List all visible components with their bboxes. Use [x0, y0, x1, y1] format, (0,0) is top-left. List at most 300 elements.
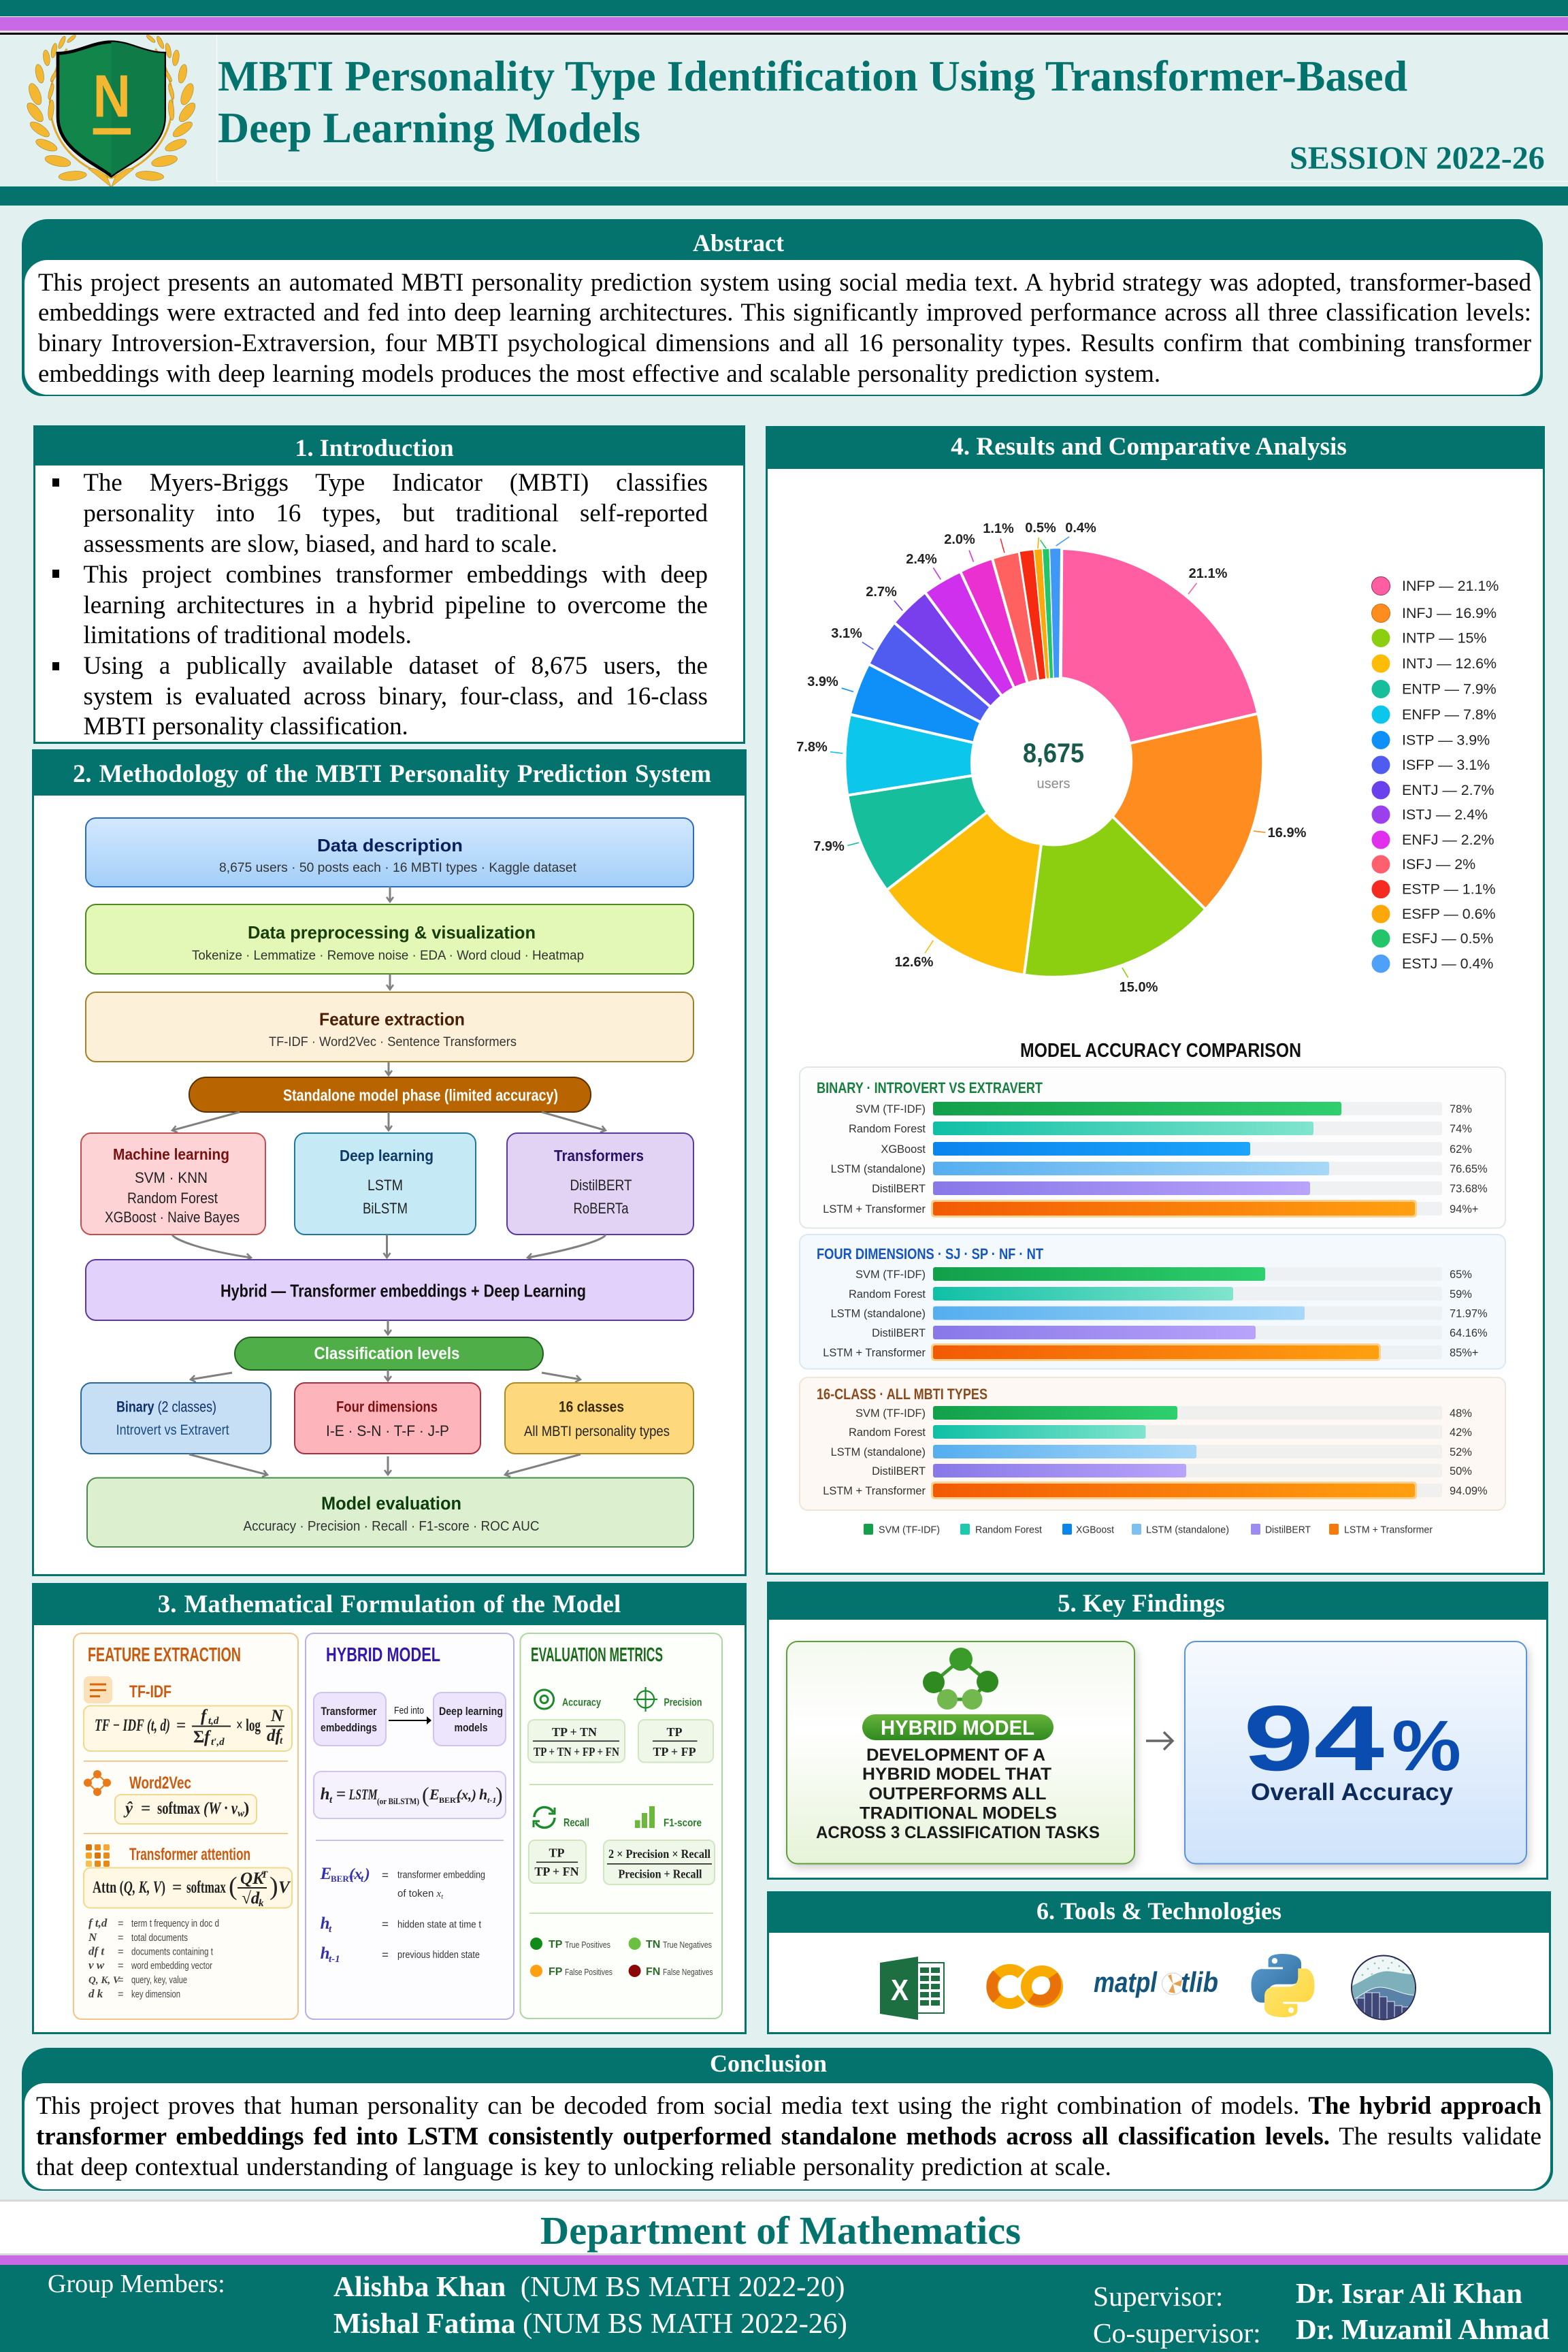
box: model evaluation: Accuracy · Precision · Recall · F1-score · ROC AUC: [244, 1519, 539, 1534]
conclusion text: that deep contextual understanding of language is key to unlocking reliable personality prediction at scale.: [36, 2153, 1111, 2180]
card: feature extraction: FEATURE EXTRACTION: [88, 1644, 241, 1666]
card: hybrid model: Fed into: [394, 1705, 424, 1716]
session label: SESSION 2022-26: [1290, 140, 1545, 176]
bar group: sixteen class: DistilBERT: [872, 1465, 926, 1477]
box: four dimensions: I-E · S-N · T-F · J-P: [326, 1422, 449, 1439]
heading: mathematical formulation: 3. Mathematical Formulation of the Model: [158, 1590, 621, 1618]
icon: university crest logo: [27, 35, 195, 186]
formula: word2vec: w: [238, 1808, 245, 1819]
formula: lstm: t-1: [487, 1795, 496, 1805]
formula: lstm: BERT: [439, 1795, 461, 1805]
top banner: teal and purple stripes: [0, 0, 1568, 35]
symbol legend: total documents: [131, 1933, 188, 1944]
formula: tf-idf: Σ: [193, 1728, 204, 1746]
icon: seaborn: [1351, 1956, 1417, 2025]
formula: accuracy: TP + TN: [552, 1725, 597, 1739]
bar group: binary: 94%+: [1450, 1203, 1478, 1215]
bar group: four dimensions: 85%+: [1450, 1347, 1478, 1359]
box: transformer embeddings: Transformer: [321, 1705, 377, 1718]
card: feature extraction: [74, 1633, 298, 2019]
pill: classification levels: Classification levels: [314, 1344, 460, 1363]
icon: word2vec network: [84, 1770, 111, 1796]
formula: tf-idf: t′,d: [211, 1737, 225, 1748]
heading: introduction: 1. Introduction: [295, 434, 454, 461]
box: feature extraction: TF-IDF · Word2Vec · Sentence Transformers: [269, 1035, 517, 1049]
donut centre total: 8,675: [1023, 738, 1084, 768]
pill: classification levels: [235, 1337, 543, 1370]
card: evaluation metrics: Precision: [664, 1697, 702, 1708]
formula: tf-idf: [84, 1705, 292, 1751]
group members label: Group Members:: [48, 2270, 225, 2298]
formula: lstm: (x,): [457, 1786, 476, 1803]
box: machine learning: Random Forest: [127, 1190, 218, 1207]
bar group: binary: SVM (TF-IDF): [855, 1103, 926, 1115]
formula: word2vec: [115, 1795, 257, 1824]
member names: Mishal Fatima (NUM BS MATH 2022-26): [333, 2308, 847, 2340]
slice percentage labels: 2.0%: [944, 532, 975, 547]
formula: lstm: (or BiLSTM): [377, 1796, 419, 1806]
formula: recall: [529, 1840, 586, 1883]
box: machine learning: Machine learning: [113, 1145, 229, 1163]
pie legend: INFJ — 16.9%: [1402, 605, 1497, 621]
icon: precision crosshair: [634, 1687, 657, 1712]
bar group: binary: 74%: [1450, 1123, 1472, 1135]
pie legend: ESFP — 0.6%: [1402, 906, 1496, 922]
icon: accuracy target: [535, 1690, 554, 1709]
supervisors: Dr. Israr Ali Khan: [1296, 2278, 1522, 2310]
bar chart legend: SVM (TF-IDF): [879, 1524, 940, 1535]
arrows to classification levels: [191, 1370, 581, 1381]
title: MBTI Personality Type Identification Using Transformer-Based: [218, 52, 1407, 100]
symbol legend: v w: [88, 1959, 105, 1972]
formula: attention: QK: [240, 1869, 265, 1888]
formula: lstm: =: [336, 1785, 346, 1803]
card: hybrid model: HYBRID MODEL: [326, 1644, 440, 1666]
formula: lstm: (: [422, 1782, 429, 1807]
introduction bullet text: [35, 466, 743, 742]
box: transformers: Transformers: [554, 1147, 644, 1164]
formula: tf-idf: N: [270, 1707, 284, 1725]
bar group: four dimensions: 59%: [1450, 1288, 1472, 1301]
symbol legend: =: [118, 1918, 124, 1929]
donut chart: MBTI distribution: [796, 521, 1307, 995]
card: hybrid model: [306, 1633, 514, 2019]
arrow: finding to accuracy: [1146, 1732, 1173, 1750]
icon: attention grid: [86, 1844, 110, 1867]
bar chart legend: Random Forest: [975, 1524, 1043, 1535]
hybrid symbol definitions: [320, 1865, 485, 1965]
bar group: sixteen class: SVM (TF-IDF): [855, 1407, 926, 1420]
confusion matrix legend: True Positives: [565, 1940, 610, 1950]
bar group: sixteen class: 52%: [1450, 1446, 1472, 1458]
panel: conclusion: [22, 2048, 1553, 2191]
slice percentage labels: 0.4%: [1065, 521, 1096, 536]
bar group: binary: 62%: [1450, 1143, 1472, 1156]
card: hybrid model finding: [787, 1642, 1134, 1863]
badge: hybrid model: HYBRID MODEL: [881, 1716, 1034, 1740]
formula: word2vec: ŷ: [123, 1799, 133, 1818]
panel: 6. Tools & Technologies: [767, 1891, 1551, 2034]
formula: tf-idf: =: [176, 1716, 186, 1735]
formula: lstm: [314, 1771, 506, 1818]
pie legend: ESTP — 1.1%: [1402, 881, 1496, 898]
pie legend: INTJ — 12.6%: [1402, 655, 1497, 672]
formula: accuracy: TP + TN + FP + FN: [534, 1745, 619, 1759]
arrows to model families: [172, 1112, 606, 1130]
box: feature extraction: Feature extraction: [319, 1009, 465, 1029]
box: binary: [81, 1383, 271, 1454]
hybrid symbol definitions: E: [320, 1865, 331, 1883]
formula: attention: ): [270, 1872, 278, 1901]
hybrid symbol definitions: of token x: [397, 1888, 441, 1899]
box: transformers: RoBERTa: [573, 1200, 629, 1217]
introduction bullet text: limitations of traditional models.: [83, 621, 412, 649]
formula: word2vec: (W · v: [203, 1799, 238, 1818]
icon: recall arrows: [534, 1807, 555, 1828]
hybrid symbol definitions: ): [363, 1865, 370, 1882]
arrows into hybrid: [172, 1235, 606, 1258]
box: deep learning models: [434, 1693, 506, 1746]
box: model evaluation: Model evaluation: [321, 1493, 461, 1514]
confusion matrix legend: TN: [646, 1939, 660, 1950]
icon: molecule network: [923, 1648, 998, 1710]
slice percentage labels: 1.1%: [983, 521, 1014, 536]
bar group: binary: LSTM (standalone): [831, 1163, 926, 1175]
heading: key findings: 5. Key Findings: [1058, 1589, 1225, 1617]
bar group: sixteen class: 94.09%: [1450, 1485, 1488, 1497]
formula: attention: √d: [242, 1889, 260, 1908]
formula: attention: =: [172, 1878, 182, 1897]
finding statement: HYBRID MODEL THAT: [862, 1765, 1051, 1784]
formula: recall: TP: [549, 1846, 565, 1860]
box: machine learning: [81, 1133, 265, 1235]
slice percentage labels: 7.8%: [796, 740, 828, 755]
member names: Alishba Khan (NUM BS MATH 2022-20): [333, 2271, 845, 2303]
pie legend: INTP — 15%: [1402, 630, 1486, 647]
conclusion heading: Conclusion: [710, 2050, 827, 2077]
panel: 1. Introduction: [33, 425, 745, 744]
donut centre total: users: [1037, 777, 1070, 791]
hybrid symbol definitions: BERT: [331, 1874, 355, 1884]
pie legend: ESTJ — 0.4%: [1402, 956, 1493, 972]
formula: attention: (: [229, 1872, 238, 1901]
pie legend: ENTJ — 2.7%: [1402, 782, 1494, 798]
box: transformers: DistilBERT: [570, 1177, 632, 1194]
formula: lstm: LSTM: [348, 1786, 378, 1803]
formula: tf-idf: TF − IDF (t, d): [95, 1716, 170, 1735]
icon: matplotlib wordmark: matpl: [1094, 1966, 1158, 1998]
confusion matrix legend: False Positives: [565, 1967, 612, 1977]
bar group: four dimensions: 71.97%: [1450, 1308, 1488, 1320]
box: data description: 8,675 users · 50 posts each · 16 MBTI types · Kaggle dataset: [219, 861, 577, 875]
supervisors: Supervisor:: [1093, 2281, 1223, 2312]
hybrid symbol definitions: h: [321, 1944, 330, 1963]
chart title: model accuracy comparison: MODEL ACCURACY COMPARISON: [1020, 1040, 1301, 1062]
icon: f1 bars: [635, 1806, 655, 1828]
box: sixteen classes: All MBTI personality types: [524, 1424, 670, 1439]
footer purple stripe: [0, 2255, 1568, 2265]
hybrid symbol definitions: =: [382, 1869, 389, 1882]
card: feature extraction: Word2Vec: [129, 1774, 191, 1793]
pie legend: ISFP — 3.1%: [1402, 757, 1490, 773]
hybrid symbol definitions: t: [329, 1924, 332, 1935]
formula: lstm: ): [495, 1782, 503, 1807]
formula: lstm: t: [329, 1795, 333, 1806]
methodology flowchart: [34, 796, 745, 1574]
pie legend: ISTJ — 2.4%: [1402, 806, 1488, 823]
bar group: four dimensions: 65%: [1450, 1269, 1472, 1281]
pill: standalone phase: Standalone model phase (limited accuracy): [283, 1087, 558, 1105]
formula: attention: Attn (Q, K, V): [93, 1878, 165, 1897]
pill: standalone phase: [189, 1077, 591, 1112]
box: deep learning: [295, 1133, 476, 1235]
formula: word2vec: ): [244, 1799, 249, 1818]
bar group: sixteen class: 16-CLASS · ALL MBTI TYPES: [817, 1386, 987, 1403]
title: Deep Learning Models: [218, 103, 640, 152]
card: overall accuracy: %: [1392, 1706, 1461, 1786]
supervisors: Co-supervisor:: [1093, 2317, 1261, 2349]
formula: tf-idf: × log: [236, 1716, 261, 1735]
formula: lstm: E: [429, 1786, 440, 1803]
bar chart legend: XGBoost: [1076, 1524, 1115, 1535]
icon: excel: [880, 1957, 944, 2020]
icon: matplotlib wordmark: [1094, 1966, 1218, 1998]
finding statement: OUTPERFORMS ALL: [868, 1784, 1047, 1803]
pie legend: ENFJ — 2.2%: [1402, 832, 1494, 848]
formula: precision: TP: [666, 1725, 683, 1739]
bar chart legend: [864, 1524, 1433, 1535]
introduction bullet text: This project combines transformer embeddings with deep: [83, 560, 708, 588]
mathematics cards: [34, 1625, 745, 2032]
symbol legend: =: [118, 1961, 124, 1972]
hybrid symbol definitions: t: [441, 1893, 443, 1901]
symbol legend: [88, 1916, 219, 2000]
box: deep learning models: models: [455, 1721, 487, 1734]
bar group: four dimensions: LSTM (standalone): [831, 1308, 926, 1320]
conclusion text: This project proves that human personality can be decoded from social media text using the right combination of models. The hybrid approach: [36, 2091, 1541, 2119]
panel: 3. Mathematical Formulation: [32, 1583, 747, 2034]
formula: attention: k: [259, 1898, 264, 1909]
box: deep learning: LSTM: [368, 1177, 403, 1194]
box: deep learning: BiLSTM: [363, 1200, 408, 1217]
card: evaluation metrics: [520, 1633, 722, 2019]
card: overall accuracy: 94: [1243, 1686, 1384, 1790]
card: evaluation metrics: Accuracy: [562, 1697, 601, 1708]
heading: results: 4. Results and Comparative Analysis: [951, 433, 1347, 461]
bar group: binary: 73.68%: [1450, 1183, 1488, 1195]
symbol legend: key dimension: [131, 1989, 180, 2000]
header title frame: [216, 35, 1568, 182]
symbol legend: =: [118, 1933, 124, 1944]
card: overall accuracy: Overall Accuracy: [1251, 1779, 1454, 1806]
box: deep learning: Deep learning: [340, 1147, 434, 1164]
box: binary: Binary (2 classes): [116, 1398, 216, 1415]
pie legend: ESFJ — 0.5%: [1402, 930, 1493, 947]
hybrid symbol definitions: (x: [349, 1865, 362, 1882]
donut centre total: [1023, 738, 1084, 791]
footer: group members and supervisors: [0, 2265, 1568, 2352]
card: evaluation metrics: Recall: [564, 1816, 589, 1829]
slice percentage labels: [796, 521, 1307, 995]
formula: tf-idf: f: [204, 1728, 212, 1746]
slice percentage labels: 21.1%: [1189, 566, 1228, 581]
box: machine learning: XGBoost · Naive Bayes: [105, 1209, 240, 1226]
symbol legend: =: [118, 1946, 124, 1957]
bar group: sixteen class: 42%: [1450, 1426, 1472, 1439]
formula: attention: T: [261, 1869, 268, 1880]
hybrid symbol definitions: previous hidden state: [397, 1949, 480, 1961]
box: hybrid: [86, 1260, 693, 1320]
conclusion text: transformer embeddings fed into LSTM consistently outperformed standalone methods across all classification levels. The results validate: [36, 2122, 1541, 2150]
slice percentage labels: 3.9%: [807, 674, 838, 689]
arrow: fed into: [389, 1716, 431, 1725]
abstract text: embeddings were extracted and fed into deep learning architectures. This significantly improved performance across all three classification levels:: [38, 298, 1531, 326]
introduction bullet text: learning architectures in a hybrid pipeline to overcome the: [83, 591, 708, 619]
icon: google colab: [992, 1970, 1058, 2004]
symbol legend: df t: [88, 1945, 105, 1957]
symbol legend: =: [118, 1975, 124, 1986]
bar chart legend: DistilBERT: [1265, 1524, 1311, 1535]
slice percentage labels: 2.4%: [906, 552, 937, 567]
finding statement: TRADITIONAL MODELS: [860, 1803, 1057, 1823]
bar group: binary: LSTM + Transformer: [823, 1203, 926, 1215]
symbol legend: f t,d: [88, 1916, 108, 1929]
card: evaluation metrics: F1-score: [664, 1817, 702, 1829]
introduction bullet text: The Myers-Briggs Type Indicator (MBTI) classifies: [83, 468, 708, 496]
box: data preprocessing: Tokenize · Lemmatize · Remove noise · EDA · Word cloud · Heatmap: [192, 949, 584, 963]
card: overall accuracy: [1185, 1642, 1526, 1863]
pie legend: INFP — 21.1%: [1402, 578, 1499, 594]
box: transformer embeddings: [314, 1693, 386, 1746]
icon: excel: X: [891, 1974, 909, 2007]
arrow: [389, 887, 391, 902]
introduction bullet text: personality into 16 types, but traditional self-reported: [83, 499, 708, 527]
formula: attention: softmax: [186, 1878, 226, 1897]
abstract text: [24, 260, 1540, 395]
introduction bullet text: system is evaluated across binary, four-class, and 16-class: [83, 682, 708, 710]
arrow: [387, 1320, 389, 1335]
bar chart legend: LSTM (standalone): [1146, 1524, 1229, 1535]
card: evaluation metrics: EVALUATION METRICS: [531, 1644, 663, 1666]
bar group: sixteen class: Random Forest: [849, 1426, 926, 1439]
hybrid symbol definitions: hidden state at time t: [397, 1919, 482, 1931]
formula: f1 score: [604, 1840, 715, 1884]
bar group: sixteen class: 48%: [1450, 1407, 1472, 1420]
symbol legend: N: [88, 1931, 97, 1944]
bar group: sixteen class: [800, 1377, 1505, 1510]
formula: word2vec: softmax: [157, 1799, 200, 1818]
box: four dimensions: [295, 1383, 480, 1454]
slice percentage labels: 12.6%: [895, 955, 934, 970]
conclusion text: [24, 2083, 1550, 2189]
icon: university crest logo: N: [93, 63, 131, 130]
card: feature extraction: Transformer attention: [129, 1845, 250, 1864]
bar group: binary: 76.65%: [1450, 1163, 1488, 1175]
bar group: four dimensions: 64.16%: [1450, 1327, 1488, 1339]
bar group: binary: XGBoost: [881, 1143, 926, 1156]
hybrid symbol definitions: =: [382, 1918, 389, 1931]
confusion matrix legend: True Negatives: [663, 1940, 712, 1950]
formula: lstm: h: [321, 1785, 330, 1803]
bar group: binary: Random Forest: [849, 1123, 926, 1135]
pie legend: ENFP — 7.8%: [1402, 706, 1497, 723]
box: deep learning models: Deep learning: [439, 1705, 503, 1718]
pie legend: ISFJ — 2%: [1402, 856, 1475, 872]
confusion matrix legend: [530, 1938, 713, 1978]
key findings content: [769, 1620, 1546, 1878]
results charts: [768, 469, 1543, 1573]
pie legend: ISTP — 3.9%: [1402, 732, 1490, 749]
box: model evaluation: [87, 1478, 693, 1547]
member names: [333, 2271, 847, 2340]
formula: tf-idf: df: [267, 1727, 283, 1745]
symbol legend: d k: [88, 1987, 103, 2000]
bar group: binary: BINARY · INTROVERT VS EXTRAVERT: [817, 1079, 1043, 1096]
formula: recall: TP + FN: [534, 1865, 579, 1878]
formula: tf-idf: t,d: [208, 1716, 219, 1727]
pie legend: [1372, 577, 1499, 973]
panel: 5. Key Findings: [767, 1582, 1548, 1880]
leader lines: [830, 537, 1265, 977]
formula: f1 score: Precision + Recall: [618, 1867, 702, 1881]
arrow: [389, 974, 391, 990]
slice percentage labels: 15.0%: [1120, 980, 1158, 995]
slice percentage labels: 2.7%: [866, 585, 897, 600]
formula: tf-idf: t: [280, 1735, 283, 1746]
formula: attention: [84, 1867, 292, 1909]
box: feature extraction: [86, 992, 693, 1062]
icon: python: [1251, 1954, 1315, 2017]
symbol legend: Q, K, V: [88, 1975, 121, 1986]
bar group: four dimensions: FOUR DIMENSIONS · SJ · SP · NF · NT: [817, 1245, 1043, 1262]
symbol legend: query, key, value: [131, 1975, 187, 1986]
bar group: binary: DistilBERT: [872, 1183, 926, 1195]
bar group: four dimensions: SVM (TF-IDF): [855, 1269, 926, 1281]
finding statement: ACROSS 3 CLASSIFICATION TASKS: [816, 1823, 1100, 1842]
formula: word2vec: =: [141, 1799, 150, 1818]
icon: matplotlib wordmark: tlib: [1181, 1966, 1218, 1998]
department band: [0, 2200, 1568, 2255]
bar group: sixteen class: LSTM + Transformer: [823, 1485, 926, 1497]
bar group: four dimensions: LSTM + Transformer: [823, 1347, 926, 1359]
slice percentage labels: 16.9%: [1268, 826, 1307, 840]
pie legend: ENTP — 7.9%: [1402, 681, 1497, 697]
abstract text: binary Introversion-Extraversion, four MBTI psychological dimensions and all 16 personality types. Results confirm that combining transformer: [38, 329, 1531, 357]
header lower teal band: [0, 186, 1568, 206]
panel: abstract: [22, 219, 1543, 396]
hybrid symbol definitions: t: [361, 1874, 364, 1884]
confusion matrix legend: FP: [549, 1966, 563, 1978]
formula: accuracy: [528, 1720, 625, 1763]
panel: 4. Results and Comparative Analysis: [766, 426, 1545, 1575]
card: feature extraction: TF-IDF: [129, 1682, 172, 1701]
finding statement: DEVELOPMENT OF A: [866, 1746, 1045, 1765]
bar chart legend: LSTM + Transformer: [1344, 1524, 1433, 1535]
symbol legend: documents containing t: [131, 1946, 213, 1957]
box: data preprocessing: [86, 904, 693, 974]
box: sixteen classes: 16 classes: [559, 1398, 624, 1415]
box: machine learning: SVM · KNN: [135, 1169, 208, 1186]
heading: tools: 6. Tools & Technologies: [1036, 1897, 1281, 1925]
slice percentage labels: 3.1%: [831, 626, 862, 641]
heading: methodology: 2. Methodology of the MBTI Personality Prediction System: [73, 760, 711, 787]
box: transformer embeddings: embeddings: [321, 1721, 377, 1734]
abstract text: embeddings with deep learning models produces the most effective and scalable personality prediction system.: [38, 359, 1160, 387]
arrow: [388, 1062, 389, 1075]
confusion matrix legend: False Negatives: [663, 1967, 713, 1977]
department name: Department of Mathematics: [540, 2208, 1021, 2253]
panel: 2. Methodology: [32, 749, 747, 1576]
